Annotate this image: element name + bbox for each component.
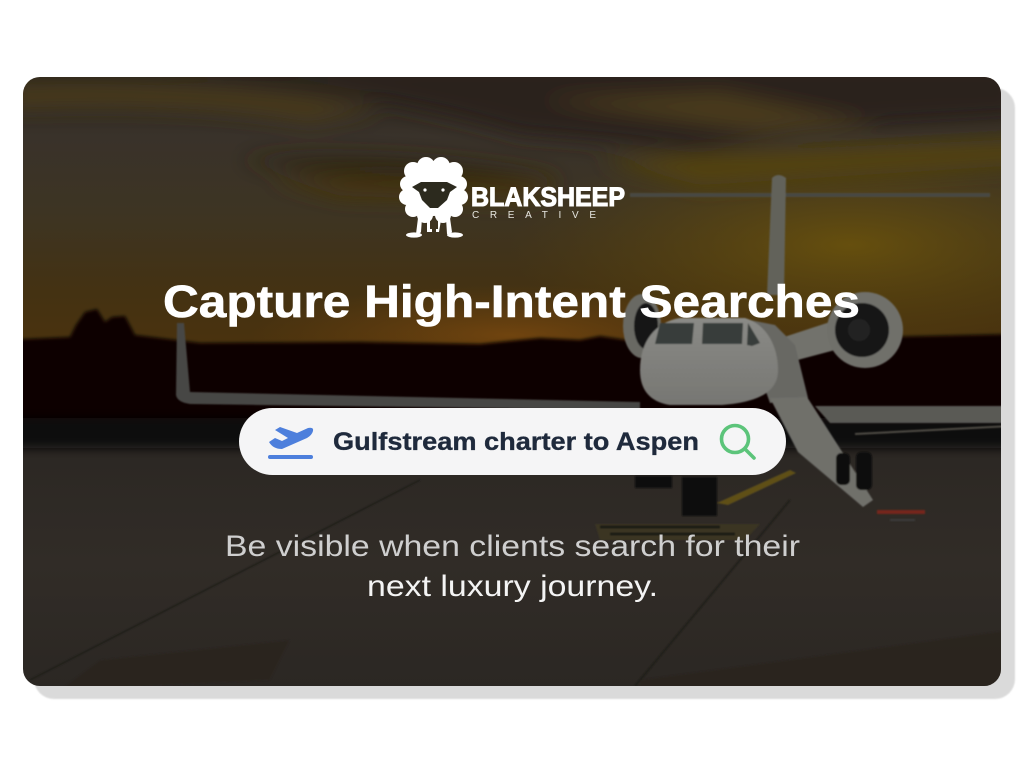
- subtitle: [225, 530, 800, 603]
- tail: [630, 175, 990, 295]
- right wing: [815, 406, 1010, 434]
- cockpit windows: [655, 323, 760, 346]
- search bar: [239, 408, 786, 475]
- right engine: [775, 292, 903, 368]
- jet: [176, 175, 1010, 521]
- air stairs: [770, 397, 873, 507]
- rear fuselage: [751, 320, 808, 404]
- card drop shadow: [34, 88, 1015, 699]
- landing gear: [635, 452, 872, 516]
- logo wordmark: BLAKSHEEP: [471, 182, 625, 212]
- left wing: [176, 323, 640, 410]
- icon: departing plane: [268, 427, 313, 459]
- ground markings: [717, 470, 796, 505]
- subtitle line 2: next luxury journey.: [367, 570, 658, 603]
- icon: sheep: [399, 157, 468, 238]
- left engine: [623, 294, 661, 358]
- logo tagline: CREATIVE: [472, 210, 596, 221]
- icon: magnifying glass: [722, 426, 754, 458]
- tree line and dark horizon: [23, 308, 1001, 426]
- infographic canvas: [23, 77, 1016, 700]
- search query text: Gulfstream charter to Aspen: [333, 428, 699, 456]
- tarmac: [0, 418, 1024, 690]
- fuselage nose: [640, 318, 778, 405]
- title: Capture High-Intent Searches: [163, 276, 860, 327]
- sky: [23, 77, 1001, 346]
- logo: BlakSheep Creative: [399, 157, 625, 238]
- subtitle line 1: Be visible when clients search for their: [225, 530, 800, 563]
